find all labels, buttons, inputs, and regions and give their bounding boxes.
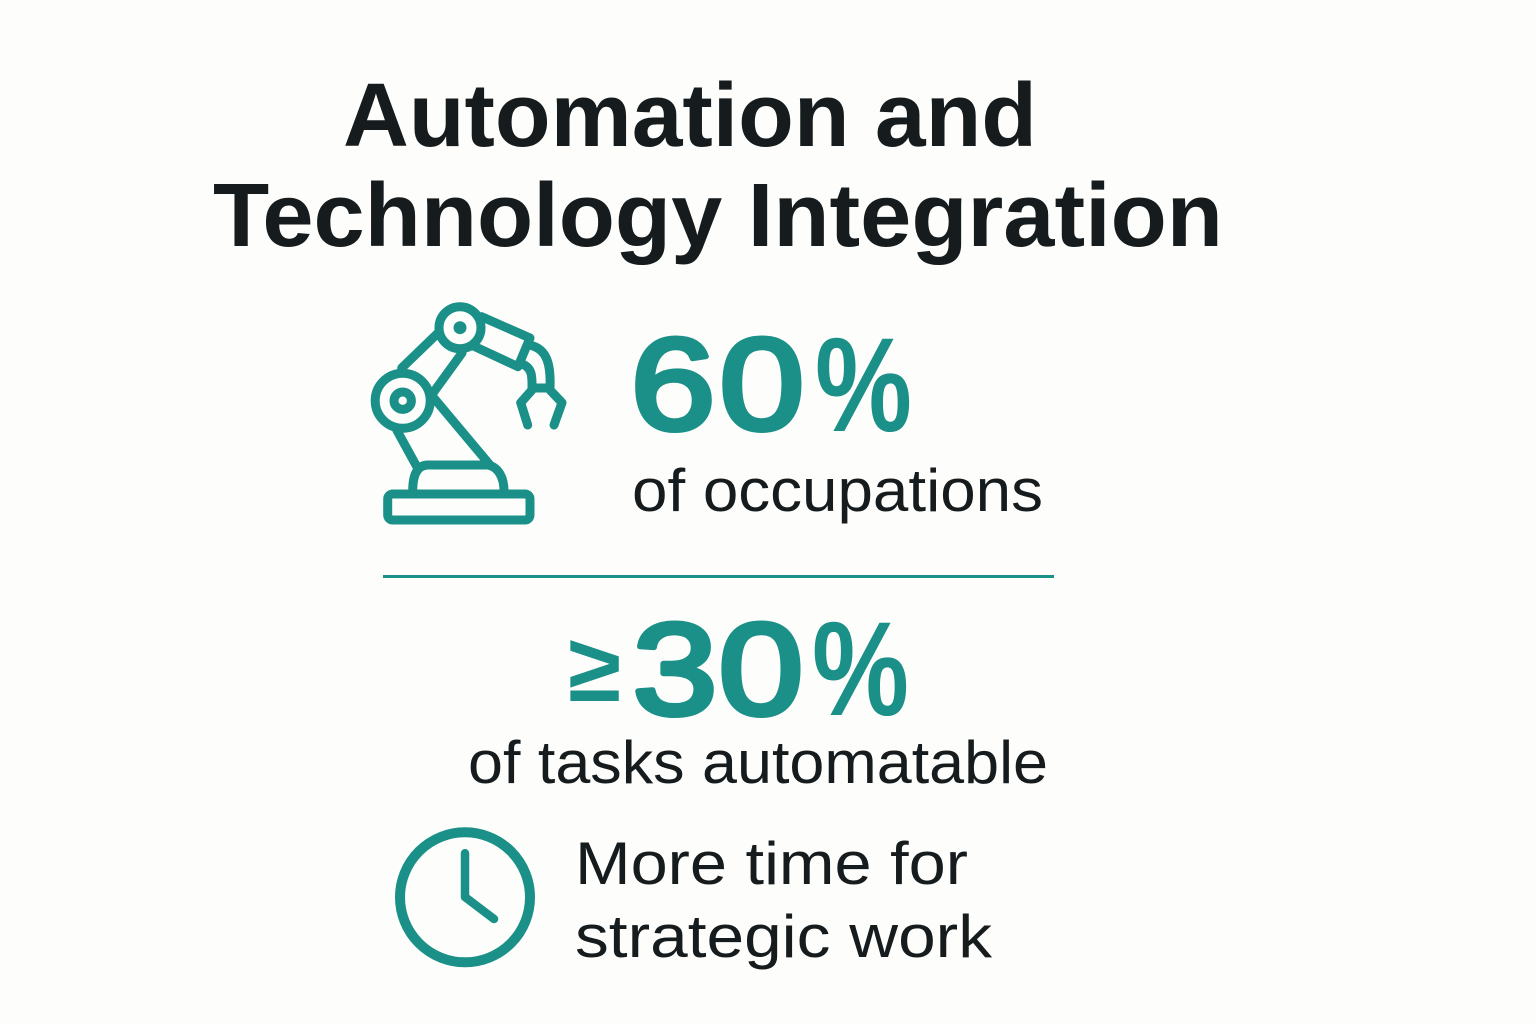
divider [383,575,1054,578]
icon: clock [400,832,530,962]
statistic: 60% [631,311,912,460]
title: Automation and [343,66,1037,166]
statistic: at least 30% [568,595,909,744]
label: of tasks automatable: of tasks automatable [468,729,1048,796]
statistic: at least 30%: ≥ [568,615,621,722]
text: more time for strategic work [575,830,993,970]
icon: robot arm [375,307,562,520]
statistic: 60%: 60 [631,311,804,457]
statistic: 60%: % [815,311,912,460]
statistic: at least 30%: % [812,595,909,744]
text: more time for strategic work: More time for [575,830,968,897]
statistic: at least 30%: 30 [633,596,803,742]
label: of occupations: of occupations [632,457,1043,524]
title: Technology Integration [213,166,1223,266]
text: more time for strategic work: strategic work [575,903,993,970]
title [213,66,1223,266]
